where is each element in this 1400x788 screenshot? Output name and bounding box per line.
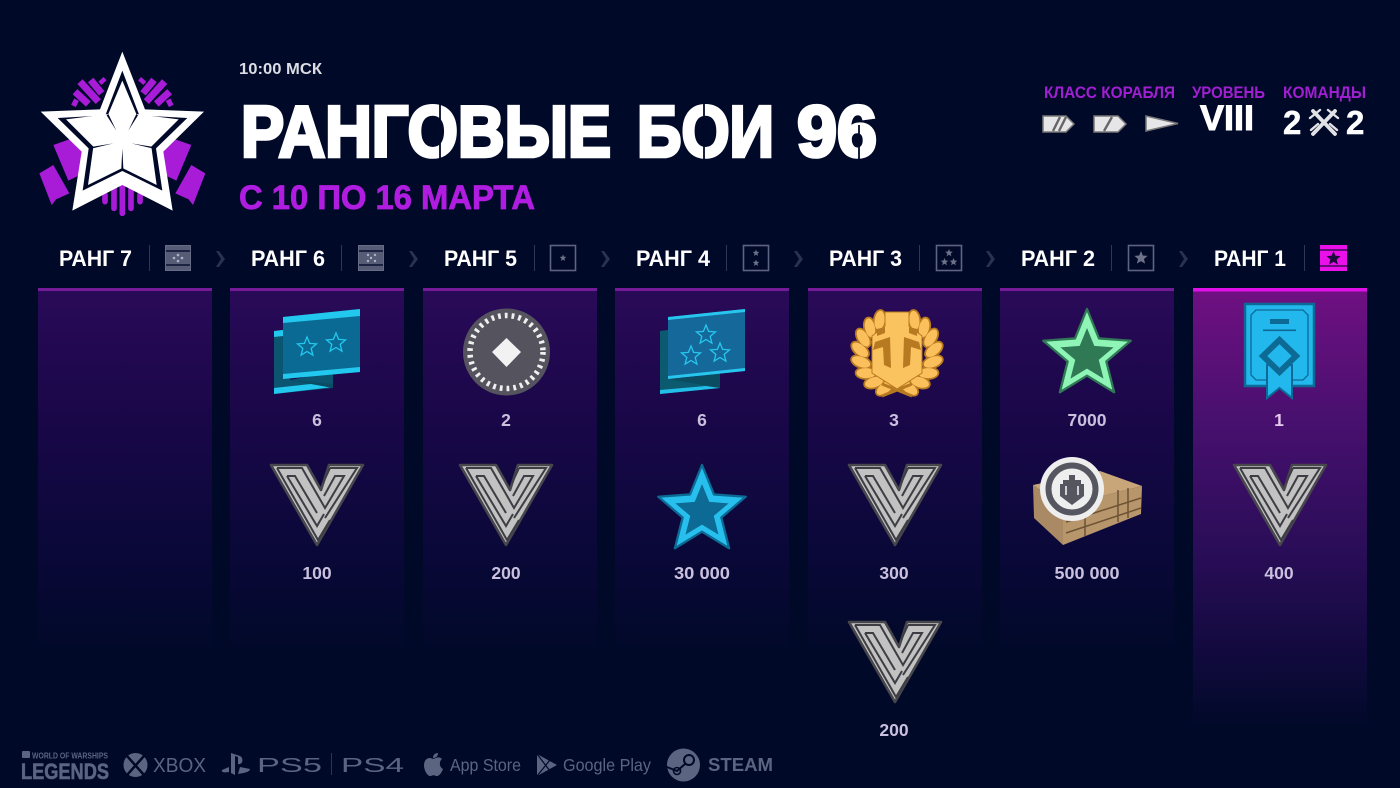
- tier block: VIII: [1200, 99, 1254, 138]
- title: 96: [797, 92, 877, 172]
- rank 2 header: [1021, 245, 1154, 271]
- panel: rank 7 column: [38, 288, 212, 650]
- icon: ship class 2: [1094, 116, 1126, 132]
- icon: crossed swords: [1310, 110, 1338, 134]
- teams block: 2: [1283, 104, 1301, 141]
- title: [241, 92, 877, 172]
- footer: playstation: PS4: [341, 755, 404, 777]
- chevron: [1179, 251, 1188, 267]
- ship class block: КЛАСС КОРАБЛЯ: [1044, 83, 1175, 102]
- rank 3 header: [829, 245, 962, 271]
- reward count: 200: [879, 720, 909, 740]
- panel: rank 3 column: [808, 288, 982, 740]
- footer: app store: App Store: [450, 755, 521, 775]
- icon: rank V badge second: [849, 622, 941, 702]
- icon: ship class 1: [1043, 116, 1074, 132]
- icon: certificate: [1245, 304, 1314, 398]
- rank 6 header: РАНГ 6: [251, 246, 325, 271]
- time label: 10:00 МСК: [239, 61, 322, 78]
- icon: rank 1 insignia: [1320, 245, 1347, 271]
- icon: ship class 3: [1146, 116, 1178, 131]
- reward count: 500 000: [1054, 563, 1120, 583]
- footer: google play: Google Play: [563, 755, 651, 775]
- rank 1 header: [1214, 245, 1347, 271]
- rank 7 header: РАНГ 7: [59, 246, 132, 271]
- icon: rank 2 insignia: [1128, 246, 1154, 270]
- icon: rank 5 insignia: [550, 246, 576, 270]
- rank 5 header: [444, 245, 576, 271]
- icon: rank 4 insignia: [744, 246, 768, 270]
- footer: game logo: [21, 750, 109, 784]
- icon: rank V badge: [849, 465, 941, 545]
- rank 5 header: РАНГ 5: [444, 246, 517, 271]
- title: РАНГОВЫЕ: [241, 92, 611, 172]
- footer: steam: [667, 748, 773, 782]
- footer: playstation: PS5: [257, 755, 322, 777]
- ship class block: [1043, 83, 1178, 132]
- footer: google play: [537, 754, 651, 776]
- teams block: 2: [1346, 104, 1364, 141]
- reward count: 30 000: [674, 563, 730, 583]
- icon: signal flag two stars: [274, 309, 360, 394]
- reward count: 100: [302, 563, 332, 583]
- panel: rank 5 column: [423, 288, 597, 650]
- icon: grey medal with diamond: [463, 308, 550, 396]
- reward count: 3: [889, 410, 899, 430]
- reward count: 400: [1264, 563, 1294, 583]
- reward count: 6: [697, 410, 707, 430]
- rank 4 header: РАНГ 4: [636, 246, 711, 271]
- tier block: УРОВЕНЬ: [1192, 83, 1265, 102]
- icon: blue star: [658, 465, 746, 548]
- icon: rank 7 insignia: [166, 246, 190, 270]
- rank 2 header: РАНГ 2: [1021, 246, 1095, 271]
- footer: xbox: XBOX: [153, 755, 206, 777]
- panel: rank 1 column: [1193, 288, 1367, 725]
- icon: green star: [1043, 309, 1131, 392]
- teams block: [1283, 83, 1366, 141]
- reward count: 2: [501, 410, 511, 430]
- dates subtitle: С 10 ПО 16 МАРТА: [239, 179, 535, 217]
- title: БОИ: [637, 92, 774, 172]
- icon: signal flag three stars: [660, 309, 745, 394]
- teams block: КОМАНДЫ: [1283, 83, 1366, 102]
- chevron: [409, 251, 418, 267]
- chevron: [794, 251, 803, 267]
- icon: rank V badge: [460, 465, 552, 545]
- reward count: 7000: [1068, 410, 1107, 430]
- footer: xbox: [124, 753, 206, 777]
- icon: rank V badge: [1234, 465, 1326, 545]
- chevron: [986, 251, 995, 267]
- tier block: [1192, 83, 1265, 138]
- panel: rank 6 column: [230, 288, 404, 650]
- footer: app store: [424, 753, 521, 776]
- footer: game logo: LEGENDS: [21, 759, 109, 784]
- reward count: 1: [1274, 410, 1284, 430]
- panel: rank 4 column: [615, 288, 789, 650]
- rank 4 header: [636, 245, 768, 271]
- panel: rank 2 column: [1000, 288, 1174, 650]
- rank 3 header: РАНГ 3: [829, 246, 902, 271]
- reward count: 200: [491, 563, 521, 583]
- chevron: [601, 251, 610, 267]
- chevron: [216, 251, 225, 267]
- rank 1 header: РАНГ 1: [1214, 246, 1286, 271]
- icon: rank V badge: [271, 465, 363, 545]
- icon: crate with coin: [1033, 457, 1142, 545]
- footer: steam: STEAM: [708, 755, 773, 775]
- rank 7 header: [59, 245, 190, 271]
- reward count: 6: [312, 410, 322, 430]
- rank 6 header: [251, 245, 384, 271]
- footer: game logo: WORLD OF WARSHIPS: [32, 750, 108, 760]
- icon: rank 6 insignia: [358, 246, 384, 270]
- logo: purple star emblem: [39, 52, 205, 213]
- icon: rank 3 insignia: [936, 246, 962, 270]
- reward count: 300: [879, 563, 909, 583]
- footer: playstation: [222, 753, 404, 777]
- icon: gold laurel emblem: [850, 310, 944, 398]
